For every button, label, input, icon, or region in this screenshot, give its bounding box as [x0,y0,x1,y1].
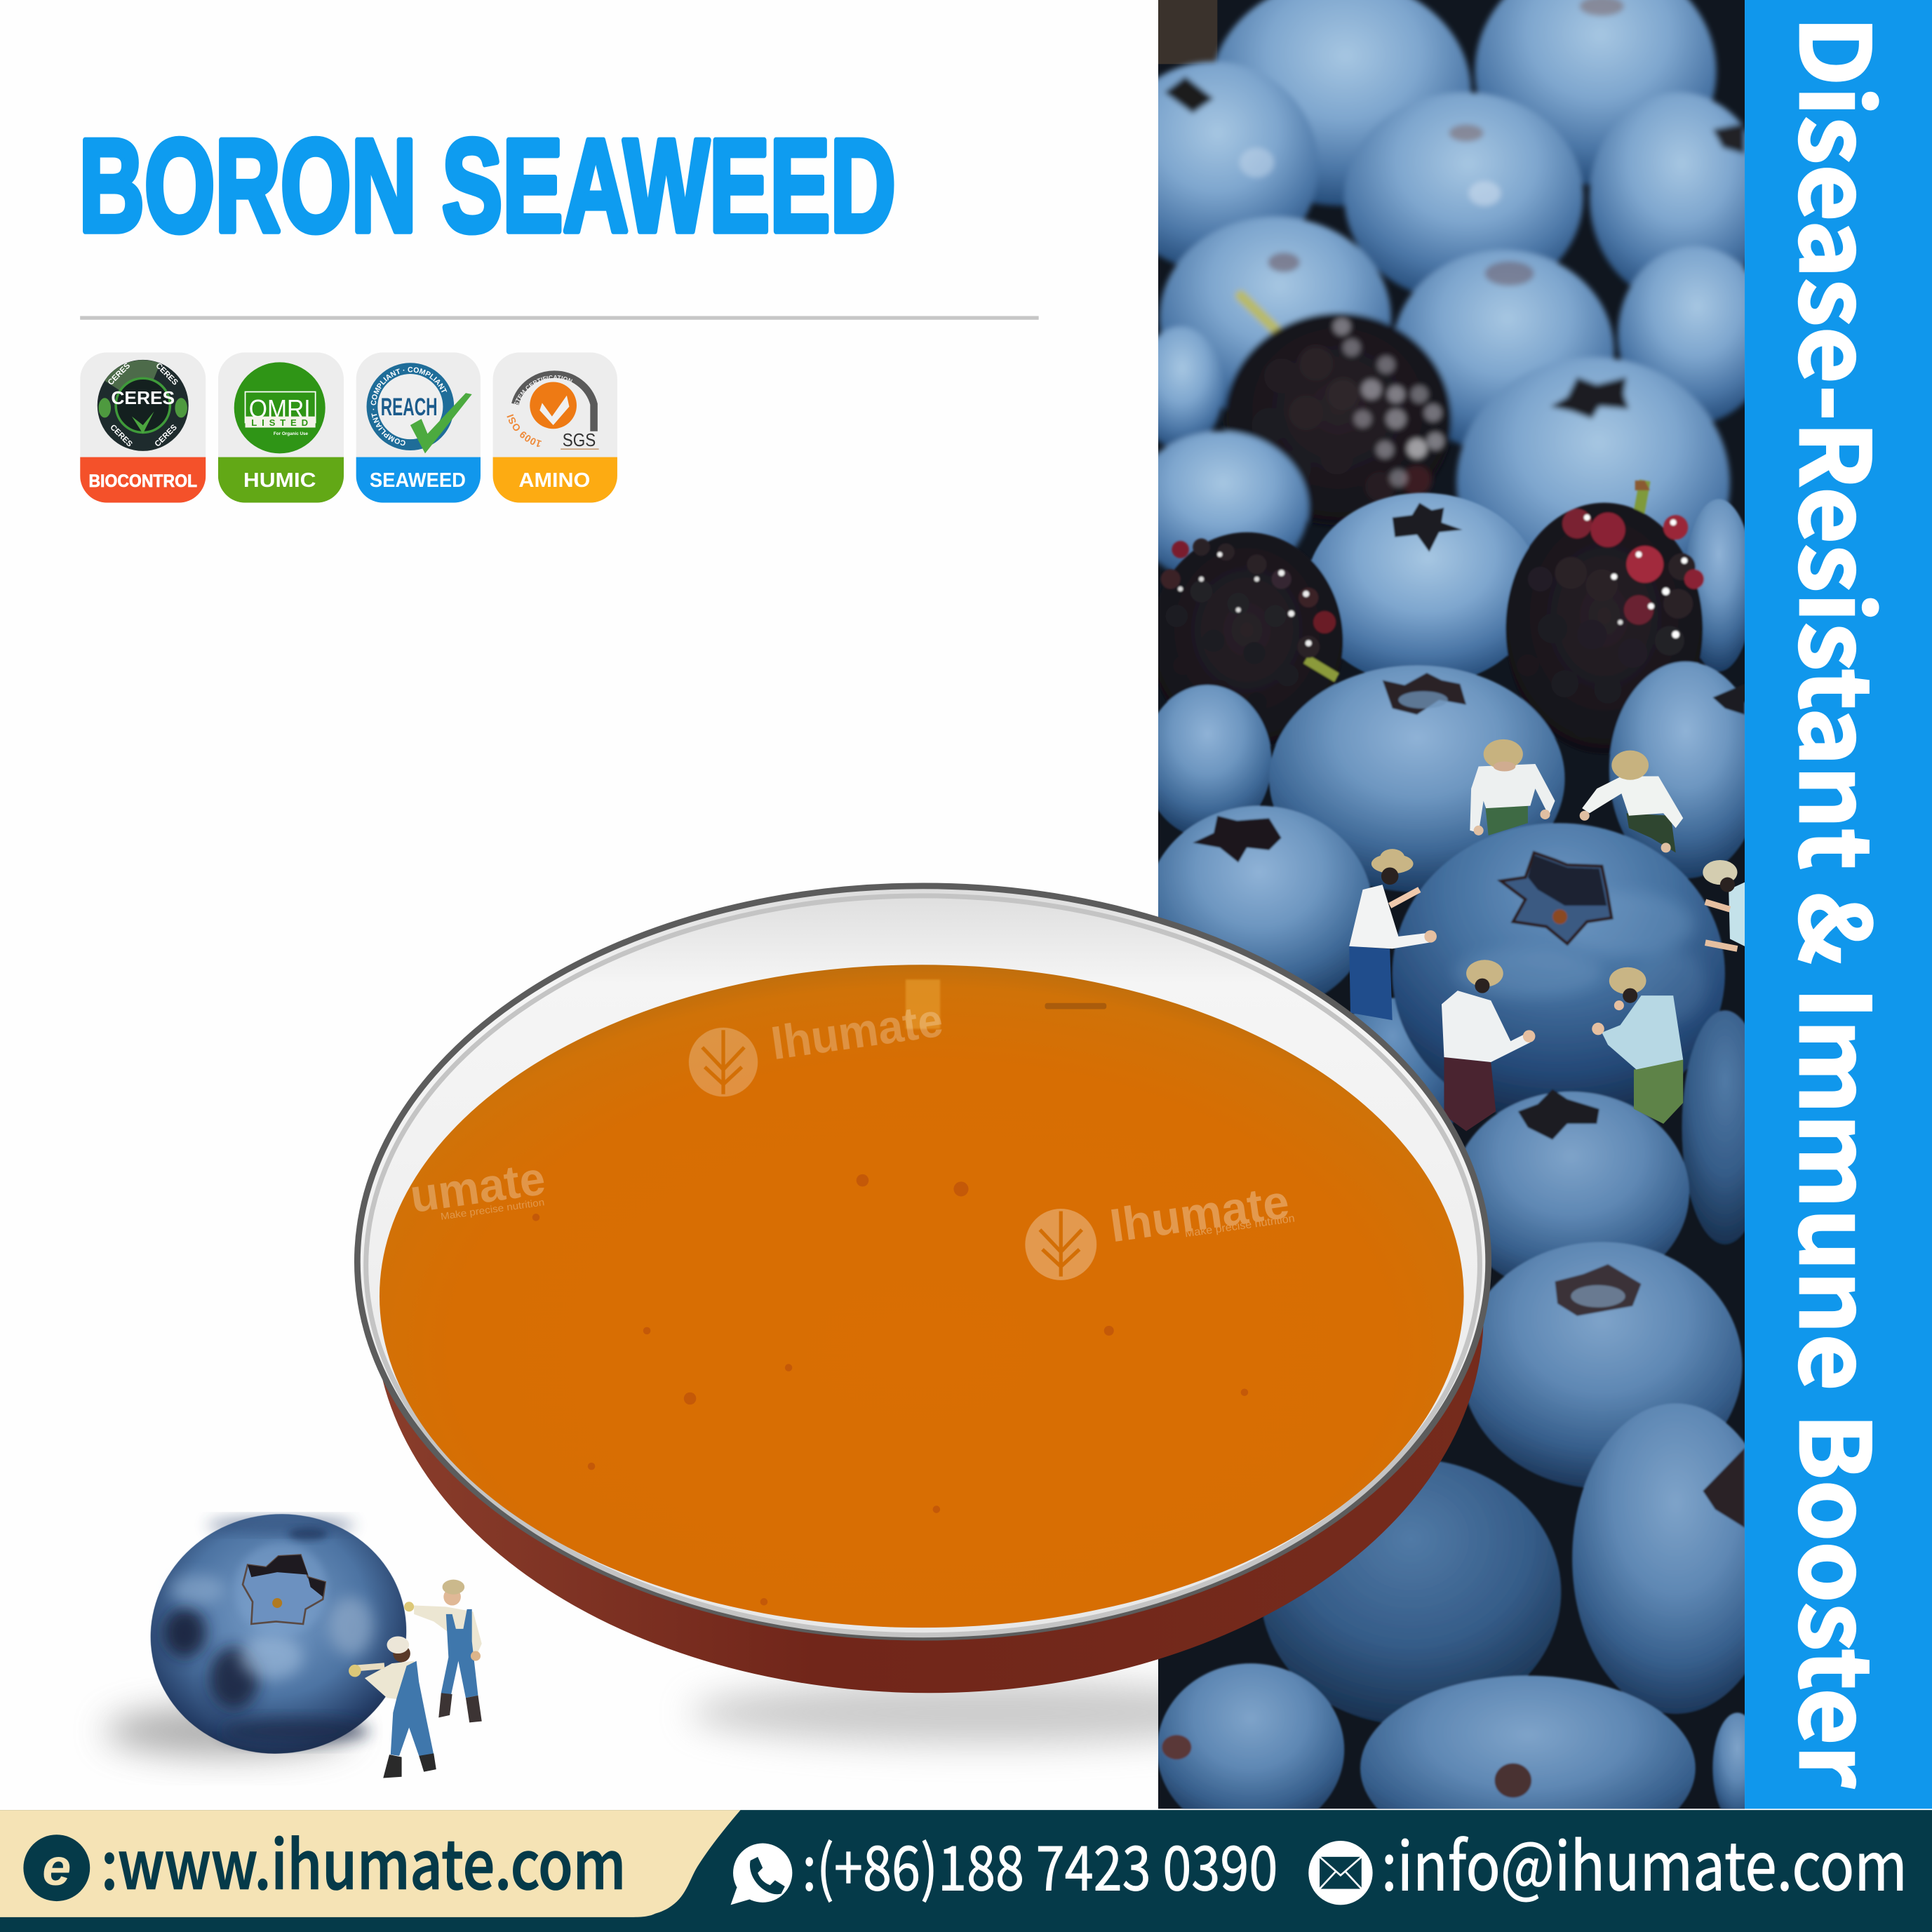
badge: REACH seaweed: COMPLIANT · COMPLIANT · COMPLIANT [370,367,448,445]
badge: SGS amino [492,352,617,503]
website text: :www.ihumate.com [101,1813,626,1909]
small blueberry with workers [105,1494,482,1778]
petri dish with amber liquid [357,886,1489,1693]
miniature worker: back left [1470,739,1555,836]
badge: CERES biocontrol: CERES [107,361,132,387]
icon: web [23,1834,90,1901]
glass rim [357,886,1489,1637]
worker facing berry [349,1636,436,1778]
small blueberry [131,1494,425,1773]
miniature worker: left [1349,849,1437,1020]
badge: OMRI humic: OMRI [249,394,311,423]
badge: REACH seaweed: REACH [381,394,438,421]
badge: OMRI humic: LISTED [251,417,308,428]
worker standing [404,1580,482,1722]
badge: OMRI humic: For Organic Use [274,431,309,436]
badge: CERES biocontrol: CERES [154,361,180,387]
badge: OMRI humic: HUMIC [243,469,316,492]
badge: CERES biocontrol [80,352,206,503]
dish shadow [690,1681,1282,1745]
watermark: centre right: Ihumate [1107,1176,1292,1252]
miniature worker: back right [1580,751,1683,852]
watermark: top: Ihumate [768,995,946,1070]
badge: CERES biocontrol: CERES [154,423,179,449]
liquid sediment marks [532,1003,1248,1606]
icon: phone [731,1844,792,1905]
phone text: :(+86)188 7423 0390 [802,1819,1277,1908]
miniature worker: front right [1592,967,1683,1124]
watermark: centre right: Make precise nutrition [1184,1213,1296,1240]
watermark: top [689,995,946,1096]
liquid highlight [906,979,940,1029]
watermark: centre right [1025,1176,1296,1280]
liquid surface [380,965,1464,1628]
badge: REACH seaweed [356,352,481,503]
watermark: left: Make precise nutrition [440,1196,545,1222]
badge: CERES biocontrol: CERES [108,423,134,449]
badge: SGS amino: SGS [563,429,596,450]
miniature worker: front left [1442,960,1535,1131]
badge: OMRI humic [218,352,344,503]
icon: email [1308,1841,1373,1905]
blackberry left [1151,532,1343,749]
badge: SGS amino: 1009 OSI [507,414,542,447]
berry shadow [105,1707,351,1756]
dish base [365,1269,1489,1693]
focused berries and blackberries [1158,478,1745,1809]
icon: web: e [42,1838,71,1896]
badge: REACH seaweed: SEAWEED [370,469,466,492]
title: BORON SEAWEED [79,112,896,259]
vertical blue banner [1745,0,1932,1809]
divider line [80,316,1039,320]
small berry calyx [234,1543,328,1636]
out-of-focus upper berries [1158,0,1745,571]
badge: CERES biocontrol: BIOCONTROL [88,472,197,491]
miniature worker: far right [1703,860,1745,948]
banner text: Disease-Resistant & Immune Booster [1772,16,1911,1788]
contact footer [0,1810,1932,1932]
footer cream tab [0,1810,741,1917]
footer dark band [0,1810,1932,1932]
panel: blueberry photograph [1158,0,1745,1809]
blackberry right [1505,481,1704,754]
certification badges [80,352,617,503]
badge: SGS amino: AMINO [518,469,590,492]
main berry calyx [1501,852,1611,944]
watermark: left: umate [407,1153,549,1223]
badge: CERES biocontrol: CERES [111,387,175,408]
blurred blackberry [1225,296,1451,525]
badge: SGS amino: SYSTEM CERTIFICATION [514,375,572,405]
